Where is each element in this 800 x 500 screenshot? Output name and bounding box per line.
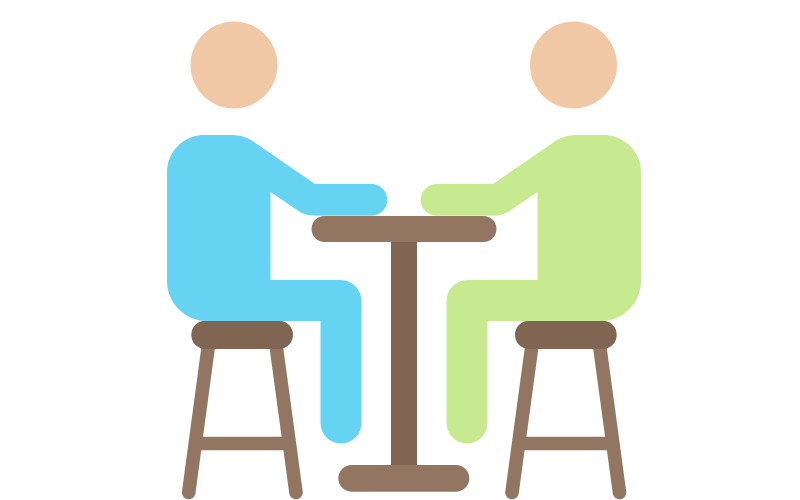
right stool [512,321,620,492]
left person body [167,135,387,444]
table pole [391,240,417,468]
right person [421,22,641,444]
left stool [189,321,296,492]
left person [167,22,387,444]
table top [312,216,496,242]
right person body [421,135,641,444]
right stool legs [512,345,620,492]
table base [338,465,469,492]
right stool seat [515,321,617,349]
left stool legs [189,345,296,492]
right person head [530,22,617,108]
left stool seat [191,321,293,349]
left person head [190,22,278,108]
